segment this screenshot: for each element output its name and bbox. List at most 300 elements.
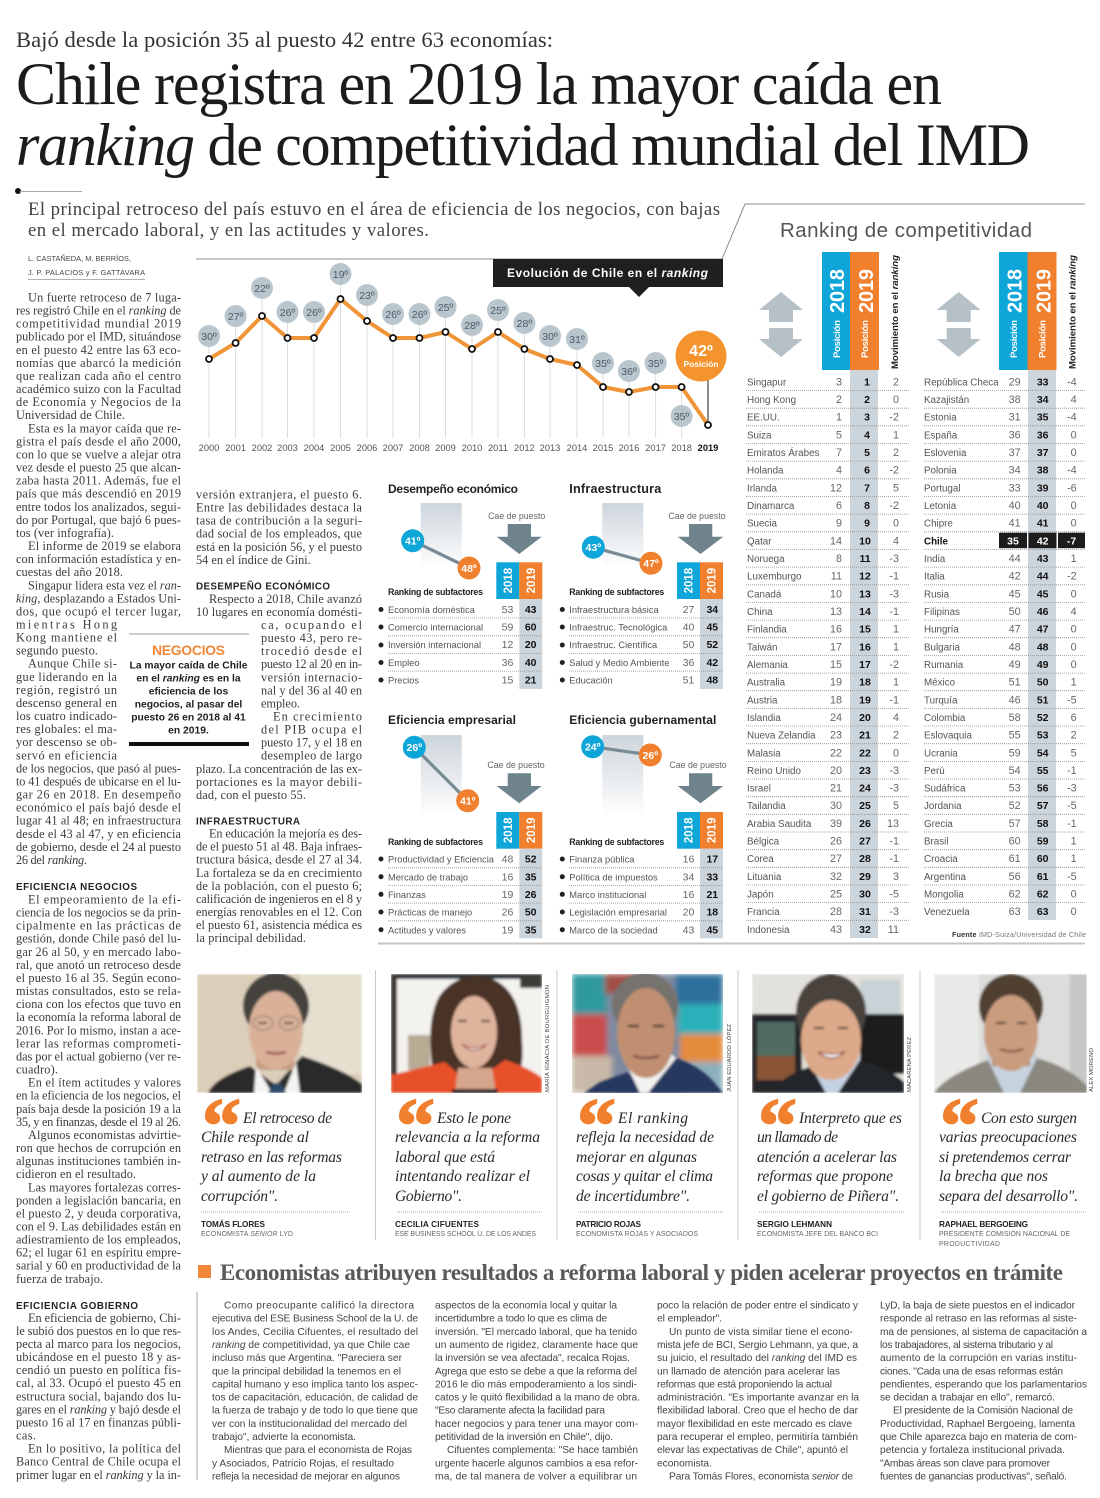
article text: left column: algunas instituciones también in- xyxy=(16,1154,181,1168)
panel: eficiencia gubernamental: 16 xyxy=(683,854,694,866)
quote: Patricio Rojas: PATRICIO ROJAS xyxy=(576,1220,642,1229)
article text: left column: publicado por el IMD, situándose xyxy=(16,330,182,344)
panel: eficiencia empresarial: 35 xyxy=(525,871,537,883)
icon: up-down arrows xyxy=(937,292,981,357)
article text: left column: cuestas del año 2018. xyxy=(16,565,123,579)
table: rankings 1-32: 15 xyxy=(859,624,871,636)
quote: Patricio Rojas: “ xyxy=(577,1082,616,1169)
bottom article columns: la inversión se vea afectada", recalca Rojas. xyxy=(435,1353,630,1364)
callout: negocios: negocios, al pasar del xyxy=(135,700,242,710)
article text: left column: zaba hasta 2011. Además, fue el xyxy=(16,474,182,488)
table: rankings 33-63: Estonia xyxy=(924,413,957,424)
table: rankings 33-63: 34 xyxy=(1037,394,1049,406)
table: rankings 1-32: -2 xyxy=(889,659,899,671)
article text: left column: Las mayores fortalezas corres- xyxy=(28,1180,181,1194)
photo: Cecilia Cifuentes xyxy=(391,974,542,1093)
panel: eficiencia empresarial: 19 xyxy=(502,924,513,936)
title: Chile registra en 2019 la mayor caída en xyxy=(16,51,942,117)
table: rankings 33-63: -5 xyxy=(1067,871,1077,883)
quote dividers xyxy=(376,970,920,1240)
table: rankings 1-32: Japón xyxy=(747,890,774,900)
table: rankings 1-32: Israel xyxy=(747,784,771,795)
kicker: Bajó desde la posición 35 al puesto 42 entre 63 economías: xyxy=(16,27,553,52)
article text: left column: nomías que abarcó la medición xyxy=(16,356,181,370)
article text: second column: desempleo de largo xyxy=(261,749,362,763)
table: rankings 1-32: Reino Unido xyxy=(747,766,801,777)
article text: left column: ron que hechos de corrupción en xyxy=(16,1141,181,1155)
table: rankings 1-32: Taiwán xyxy=(747,642,778,653)
table: rankings 33-63: 41 xyxy=(1037,518,1049,530)
panel: eficiencia empresarial: Mercado de trabajo xyxy=(388,872,468,882)
table: rankings 33-63: 57 xyxy=(1037,800,1049,812)
panel: desempeño económico: 20 xyxy=(525,639,537,651)
article text: second column: puesto 17, y el 18 en xyxy=(261,736,362,750)
table: rankings 1-32: Posición xyxy=(860,320,871,358)
table: rankings 33-63: 44 xyxy=(1037,571,1049,583)
bottom article columns: ranking de competitividad, ya que Chile cae xyxy=(212,1340,410,1351)
article text: left column: mistas consultados, esto se rela- xyxy=(16,984,181,998)
table: rankings 33-63: 4 xyxy=(1071,394,1077,406)
table: rankings 1-32: 12 xyxy=(830,482,842,494)
quote: Raphael Bergoeing: PRESIDENTE COMISIÓN NACIONAL DE xyxy=(939,1229,1070,1238)
table: rankings 33-63: 33 xyxy=(1009,482,1021,494)
bottom article columns: su juicio, el resultado del ranking del IMD es xyxy=(657,1353,857,1364)
table: rankings 33-63: Grecia xyxy=(924,819,953,830)
table: rankings 33-63: Posición xyxy=(1038,320,1048,358)
table: rankings 1-32: 8 xyxy=(864,500,870,512)
value bubbles xyxy=(198,263,693,427)
quote: Sergio Lehmann: ECONOMISTA JEFE DEL BANCO BCI xyxy=(757,1231,878,1238)
panel: eficiencia empresarial: 26º xyxy=(407,742,422,754)
table: rankings 33-63: República Checa xyxy=(924,377,999,388)
table: rankings 1-32: 20 xyxy=(830,765,842,777)
table: rankings 33-63: 42 xyxy=(1009,571,1021,583)
byline: L. CASTAÑEDA, M. BERRÍOS, xyxy=(28,254,131,263)
value bubbles: 27º xyxy=(228,311,244,323)
panel: eficiencia gubernamental xyxy=(560,713,727,938)
panel: infraestructura: 27 xyxy=(683,604,694,616)
table: rankings 1-32: 12 xyxy=(859,571,871,583)
table: rankings 1-32: Indonesia xyxy=(747,925,790,936)
panel: desempeño económico: 40 xyxy=(525,657,537,669)
article text: left column: cipalmente en las prácticas de xyxy=(16,919,182,933)
table: rankings 33-63: Filipinas xyxy=(924,607,960,618)
quote: Patricio Rojas: El ranking xyxy=(617,1110,688,1127)
article text: second column: calificación de ingenieros en el 8 y xyxy=(196,892,363,906)
table: rankings 33-63: Jordania xyxy=(924,801,962,812)
table: rankings 33-63: Portugal xyxy=(924,483,960,494)
panel: desempeño económico: Inversión internacional xyxy=(388,640,481,650)
table: rankings 33-63: 43 xyxy=(1037,553,1049,565)
quote: Tomás Flores: TOMÁS FLORES xyxy=(201,1219,266,1229)
year axis: 2006 xyxy=(357,443,377,453)
table: rankings 1-32: 43 xyxy=(830,924,842,936)
table: rankings 33-63: -5 xyxy=(1067,694,1077,706)
callout: negocios: NEGOCIOS xyxy=(152,642,225,658)
table: rankings 33-63: 54 xyxy=(1037,747,1049,759)
table: rankings 1-32: 6 xyxy=(864,465,870,477)
article text: left column: dos, que ocupó el tercer lugar, xyxy=(16,604,181,618)
quote: Patricio Rojas xyxy=(576,1082,724,1238)
bottom article columns: ver con la institucionalidad del mercado del xyxy=(212,1419,407,1430)
value bubbles: 26º xyxy=(280,307,295,319)
table: rankings 33-63: 62 xyxy=(1009,888,1021,900)
table: rankings 1-32: Suiza xyxy=(747,430,772,441)
table: rankings 33-63: 49 xyxy=(1037,659,1049,671)
panel: eficiencia gubernamental: 2018 xyxy=(684,817,696,843)
panel: eficiencia gubernamental: Ranking de subfactores xyxy=(569,837,664,847)
source note: Fuente IMD-Suiza/Universidad de Chile xyxy=(952,930,1086,939)
bottom article columns: petencia y fortaleza institucional privada. xyxy=(880,1445,1065,1456)
article text: left column: Universidad de Chile. xyxy=(16,408,125,422)
bottom article columns: flexibilidad laboral. Creo que el hecho de dar xyxy=(657,1406,859,1417)
table: rankings 1-32: 17 xyxy=(830,641,842,653)
article text: left column: lerar las reformas comprometi- xyxy=(16,1036,181,1050)
table: rankings 33-63: -4 xyxy=(1067,412,1077,424)
panel: desempeño económico: 2019 xyxy=(526,568,538,593)
table: rankings 1-32: Tailandia xyxy=(747,801,786,812)
divider under charts xyxy=(378,942,1085,944)
article text: second column: En crecimiento xyxy=(273,710,362,724)
line chart: evolución de Chile xyxy=(198,259,726,453)
table: rankings 1-32: 1 xyxy=(864,376,870,388)
year axis xyxy=(199,443,718,453)
panel: eficiencia gubernamental: 20 xyxy=(683,907,694,919)
table: rankings 1-32: 25 xyxy=(830,888,842,900)
table: rankings 1-32: 0 xyxy=(893,394,899,406)
table: rankings 1-32: Irlanda xyxy=(747,483,778,494)
bottom article columns: pendientes, esperando que los parlamentarios xyxy=(880,1379,1087,1390)
bottom article columns: Agrega que esto se debe a que la reforma del xyxy=(435,1366,637,1377)
article text: left column: con lo que se vuelve a alejar otra xyxy=(16,448,182,462)
table: rankings 33-63: Polonia xyxy=(924,466,957,477)
panel: desempeño económico: 60 xyxy=(525,622,537,634)
table: rankings 33-63: 0 xyxy=(1071,518,1077,530)
table: rankings 1-32: -3 xyxy=(889,553,899,565)
row: Chile highlighted xyxy=(924,533,1085,548)
table: rankings 1-32: 2019 xyxy=(856,269,878,313)
table: rankings 33-63: Posición xyxy=(1009,320,1020,358)
year axis: 2009 xyxy=(435,443,456,453)
article text: left column: 2016. Por lo mismo, instan a ace- xyxy=(16,1023,181,1037)
table: rankings 33-63: -6 xyxy=(1067,482,1077,494)
quote: Tomás Flores: Chile responde al xyxy=(201,1129,309,1146)
panel: desempeño económico xyxy=(378,482,545,689)
table: rankings 1-32: Australia xyxy=(747,678,786,689)
article text: left column: cidieron en el resultado. xyxy=(16,1167,136,1181)
table: rankings 1-32: 3 xyxy=(836,376,842,388)
year axis: 2000 xyxy=(199,443,219,453)
panel: eficiencia empresarial: 35 xyxy=(525,924,537,936)
article text: left column: primer lugar en el ranking y la in- xyxy=(16,1468,181,1482)
article text: left column: En eficiencia de gobierno, Chi- xyxy=(28,1311,181,1325)
quote: Raphael Bergoeing: si pretendemos cerrar xyxy=(939,1149,1072,1166)
table: rankings 33-63: 61 xyxy=(1009,853,1021,865)
table: rankings 1-32: 5 xyxy=(836,429,842,441)
table: rankings 1-32: Dinamarca xyxy=(747,501,795,512)
bottom article columns: administración. "Es importante avanzar en la xyxy=(657,1393,859,1404)
value bubbles: 19º xyxy=(333,269,348,281)
table: rankings 1-32: 26 xyxy=(830,836,842,848)
article text: left column: con información estadística y en- xyxy=(16,552,181,566)
table: rankings 33-63: 0 xyxy=(1071,624,1077,636)
panel: eficiencia empresarial: Finanzas xyxy=(388,890,426,900)
table: rankings 33-63: México xyxy=(924,678,956,689)
quote: Tomás Flores xyxy=(199,1082,350,1238)
bottom article columns: un llamado de atención para acelerar las xyxy=(657,1366,840,1377)
table: rankings 1-32: Holanda xyxy=(747,466,784,477)
table: rankings 1-32: 32 xyxy=(830,871,842,883)
callout: negocios: en el ranking es en la xyxy=(136,674,241,684)
table: rankings 33-63: 50 xyxy=(1009,606,1021,618)
article text: left column: El informe de 2019 se elabora xyxy=(28,539,182,553)
table: rankings 1-32: 32 xyxy=(859,924,871,936)
table: rankings 33-63: 36 xyxy=(1009,429,1021,441)
article text: left column: servó en eficiencia xyxy=(16,748,118,762)
table: rankings 1-32: 27 xyxy=(830,853,842,865)
year axis: 2013 xyxy=(540,443,560,453)
article text: second column: versión extranjera, el puesto 6. xyxy=(196,488,362,502)
table: rankings 33-63: 49 xyxy=(1009,659,1021,671)
article text: left column: 35, y en finanzas, desde el 19 al 26. xyxy=(16,1115,181,1129)
quote: Cecilia Cifuentes: laboral que está xyxy=(395,1149,495,1166)
subtitle: El principal retroceso del país estuvo en el área de eficiencia de los negocios, con bajas xyxy=(28,199,720,220)
bottom article columns: los Andes, Cecilia Cifuentes, el resultado del xyxy=(212,1327,418,1338)
table: rankings 1-32: Alemania xyxy=(747,660,788,671)
chart title banner: Evolución de Chile en el ranking xyxy=(507,266,709,280)
article text: left column: Aunque Chile si- xyxy=(28,657,117,671)
table: rankings 1-32: 19 xyxy=(859,694,871,706)
article text: second column: de el puesto 51 al 48. Baja infraes- xyxy=(196,840,362,854)
panel: eficiencia gubernamental: 16 xyxy=(683,889,694,901)
value bubbles: 36º xyxy=(621,366,637,378)
article text: left column: los cuatro indicado- xyxy=(16,709,117,723)
table: rankings 1-32: -3 xyxy=(889,765,899,777)
panel: infraestructura: Salud y Medio Ambiente xyxy=(569,658,670,668)
table: rankings 33-63: 51 xyxy=(1009,677,1021,689)
article text: second column: del PIB ocupa el xyxy=(261,723,363,737)
article text: second column: portaciones es la mayor debili- xyxy=(196,775,362,789)
panel: infraestructura: 51 xyxy=(683,674,694,686)
panel: infraestructura: Infraestructura xyxy=(569,482,662,496)
table: rankings 33-63 xyxy=(924,252,1085,920)
table: rankings 33-63: 62 xyxy=(1037,888,1049,900)
article text: second column: tasa de contribución a la seguri- xyxy=(196,514,362,528)
value bubbles: 35º xyxy=(648,358,664,370)
table: rankings 1-32: Qatar xyxy=(747,536,772,547)
table: rankings 1-32: 16 xyxy=(859,641,871,653)
table: rankings 1-32: 22 xyxy=(830,747,842,759)
quote: Raphael Bergoeing: RAPHAEL BERGOEING xyxy=(939,1220,1028,1229)
row: Chile highlighted: Chile xyxy=(924,536,949,547)
photo credits: ALEX MORENO xyxy=(1089,1048,1095,1092)
table: rankings 33-63: 6 xyxy=(1071,712,1077,724)
table: rankings 1-32: 2 xyxy=(864,394,870,406)
article text: left column: región, registró un xyxy=(16,683,117,697)
table: rankings 1-32: -3 xyxy=(889,906,899,918)
table: rankings 1-32: Malasia xyxy=(747,748,781,759)
table: rankings 33-63: Bulgaria xyxy=(924,642,960,653)
table: rankings 33-63: 38 xyxy=(1009,394,1021,406)
table: rankings 33-63: Hungría xyxy=(924,625,959,636)
table: rankings 33-63: Colombia xyxy=(924,713,966,724)
table: rankings 1-32: 21 xyxy=(859,730,871,742)
table: rankings 1-32: 5 xyxy=(893,800,899,812)
table: rankings 1-32: 13 xyxy=(887,818,899,830)
table: rankings 33-63: India xyxy=(924,554,946,565)
panel: eficiencia empresarial: 2018 xyxy=(503,817,515,843)
panel: eficiencia empresarial: 50 xyxy=(525,907,537,919)
article text: left column: ubicándose en el puesto 18 y as- xyxy=(16,1350,181,1364)
panel: desempeño económico: 12 xyxy=(502,639,513,651)
table: rankings 33-63: 63 xyxy=(1037,906,1049,918)
value bubbles: 26º xyxy=(385,309,401,321)
quote: Tomás Flores: retraso en las reformas xyxy=(201,1149,342,1166)
quote: Sergio Lehmann: Interpreto que es xyxy=(798,1110,902,1127)
table: rankings 33-63: 54 xyxy=(1009,765,1021,777)
photo credits: MARÍA IGNACIA DE BOURGUIGNON xyxy=(544,985,551,1092)
panel: eficiencia empresarial: 26 xyxy=(502,907,513,919)
panel: eficiencia empresarial: Actitudes y valores xyxy=(388,925,466,935)
table: rankings 1-32: 9 xyxy=(836,518,842,530)
subtitle: en el mercado laboral, y en las actitudes y valores. xyxy=(28,220,429,241)
table: rankings 33-63: 56 xyxy=(1009,871,1021,883)
table: rankings 33-63: 53 xyxy=(1009,783,1021,795)
table: rankings 1-32: 29 xyxy=(859,871,871,883)
table: rankings 33-63: España xyxy=(924,430,958,441)
article text: left column: res globales: el ma- xyxy=(16,722,117,736)
table: rankings 33-63: -5 xyxy=(1067,800,1077,812)
table: rankings 33-63: 45 xyxy=(1009,588,1021,600)
table: rankings 1-32: 24 xyxy=(859,783,871,795)
article text: left column: do por Portugal, que bajó 6 pues- xyxy=(16,513,181,527)
table: rankings 1-32: 11 xyxy=(831,571,842,583)
article text: second column: nal y del 36 al 40 en xyxy=(261,683,362,697)
article text: left column: 26 del ranking. xyxy=(16,853,87,867)
bottom article columns: que la principal debilidad la tenemos en el xyxy=(212,1366,401,1377)
panel: eficiencia empresarial: Eficiencia empresarial xyxy=(388,713,516,727)
bottom article columns: Para Tomás Flores, economista senior de xyxy=(669,1472,853,1482)
panel: infraestructura: 34 xyxy=(706,604,718,616)
photo: Tomás Flores xyxy=(197,973,362,1093)
panel: desempeño económico: 15 xyxy=(502,674,513,686)
table: rankings 1-32: Suecia xyxy=(747,519,778,530)
article text: left column: tos (ver infografía). xyxy=(16,526,114,540)
article text: left column: le subió dos puestos en lo que res- xyxy=(16,1324,181,1338)
panel: desempeño económico: 48º xyxy=(461,563,477,575)
article text: left column: EFICIENCIA NEGOCIOS xyxy=(16,882,137,893)
panel: infraestructura: 48 xyxy=(706,674,718,686)
article text: left column: desde el 43 al 47, y en eficiencia xyxy=(16,827,182,841)
table: rankings 33-63: 2 xyxy=(1071,730,1077,742)
photo: Patricio Rojas xyxy=(572,973,723,1093)
quote: Cecilia Cifuentes: “ xyxy=(396,1082,435,1169)
table: rankings 33-63: Argentina xyxy=(924,872,966,883)
table: rankings 1-32: Francia xyxy=(747,907,780,918)
panel: eficiencia empresarial: 48 xyxy=(502,854,513,866)
panel: infraestructura: 47º xyxy=(643,558,659,570)
bottom article columns: que Chile aparezca bajo en materia de com- xyxy=(880,1432,1077,1443)
article text: second column: está en la posición 56, y el puesto xyxy=(196,540,362,554)
panel: desempeño económico: Economía doméstica xyxy=(388,605,476,615)
table: rankings 1-32: 3 xyxy=(893,871,899,883)
table: rankings 33-63: Mongolia xyxy=(924,890,964,900)
quote: Sergio Lehmann: “ xyxy=(758,1082,797,1169)
quote: Cecilia Cifuentes: intentando realizar el xyxy=(395,1168,530,1185)
article text: second column: DESEMPEÑO ECONÓMICO xyxy=(196,581,330,593)
bottom article columns: "Ambas áreas son clave para promover xyxy=(880,1458,1051,1469)
year axis: 2019 xyxy=(698,443,718,453)
table: rankings 1-32: 5 xyxy=(893,482,899,494)
article text: left column: EFICIENCIA GOBIERNO xyxy=(16,1301,138,1312)
panel: desempeño económico: 43 xyxy=(525,604,537,616)
bottom article columns: y Asociados, Patricio Rojas, el resultado xyxy=(212,1458,394,1469)
table: rankings 1-32: 20 xyxy=(859,712,871,724)
row: Chile highlighted: -7 xyxy=(1067,535,1076,547)
year axis: 2005 xyxy=(330,443,351,453)
article text: left column: vez desde el puesto 25 que alcan- xyxy=(16,460,181,474)
photo credits: MACARENA PÉREZ xyxy=(906,1037,913,1092)
table: rankings 33-63: 35 xyxy=(1037,412,1049,424)
icon: up-down arrows xyxy=(759,292,803,357)
table: rankings 1-32: Lituania xyxy=(747,872,782,883)
article text: left column: yor descenso se ob- xyxy=(16,735,117,749)
article text: left column: ciona con los efectos que tuvo en xyxy=(16,997,181,1011)
table: rankings 1-32: 10 xyxy=(859,535,871,547)
table: rankings 1-32: 16 xyxy=(830,624,842,636)
table: rankings 1-32: 28 xyxy=(830,906,842,918)
table: rankings 1-32: 2 xyxy=(893,730,899,742)
table: rankings 1-32: 13 xyxy=(830,606,842,618)
value bubbles: 35º xyxy=(674,411,690,423)
panel: infraestructura: 42 xyxy=(706,657,718,669)
year axis: 2018 xyxy=(671,443,692,453)
table: rankings 33-63: 55 xyxy=(1037,765,1049,777)
article text: left column xyxy=(16,290,182,1482)
article text: left column: entre todos los analizados, segui- xyxy=(16,500,181,514)
quote: Raphael Bergoeing xyxy=(939,1082,1087,1248)
table: rankings 1-32: -3 xyxy=(889,783,899,795)
table: rankings 1-32: 25 xyxy=(859,800,871,812)
table: rankings 1-32: Arabia Saudita xyxy=(747,819,812,830)
photo: Raphael Bergoeing xyxy=(934,974,1087,1093)
value bubbles: 30º xyxy=(542,331,558,343)
panel: infraestructura: 40 xyxy=(683,622,694,634)
article text: left column: gistra el país desde el año 2000, xyxy=(16,434,181,448)
article text: left column: Singapur lidera esta vez el ran- xyxy=(28,578,181,592)
value bubbles: 28º xyxy=(517,318,532,330)
bottom article columns: ma de pensiones, al sistema de capacitación a xyxy=(880,1327,1087,1338)
table: rankings 33-63: 59 xyxy=(1037,836,1049,848)
table: rankings 1-32: Bélgica xyxy=(747,837,780,848)
table: rankings 33-63: 56 xyxy=(1037,783,1049,795)
article text: left column: En el ítem actitudes y valores xyxy=(28,1076,181,1090)
panel: infraestructura: Cae de puesto xyxy=(668,511,726,521)
table: rankings 1-32: 18 xyxy=(859,677,871,689)
bottom article columns: mista jefe de BCI, Sergio Lehmann, ya que, a xyxy=(657,1340,858,1351)
article text: second column: 10 lugares en economía domésti- xyxy=(196,605,362,619)
quote: Raphael Bergoeing: varias preocupaciones xyxy=(939,1129,1077,1146)
table: rankings 1-32: -1 xyxy=(889,853,899,865)
panel: eficiencia gubernamental: Marco institucional xyxy=(569,890,646,900)
table: rankings 33-63: 0 xyxy=(1071,588,1077,600)
quote: Cecilia Cifuentes: ESE BUSINESS SCHOOL U. DE LOS ANDES xyxy=(395,1231,536,1238)
article text: left column: gar 26 al 50, y en mercado labo- xyxy=(16,945,181,959)
table: rankings 33-63: 31 xyxy=(1009,412,1021,424)
table: rankings 33-63: 40 xyxy=(1009,500,1021,512)
article text: second column: Respecto a 2018, Chile avanzó xyxy=(209,592,362,606)
table: rankings 1-32: -1 xyxy=(889,694,899,706)
